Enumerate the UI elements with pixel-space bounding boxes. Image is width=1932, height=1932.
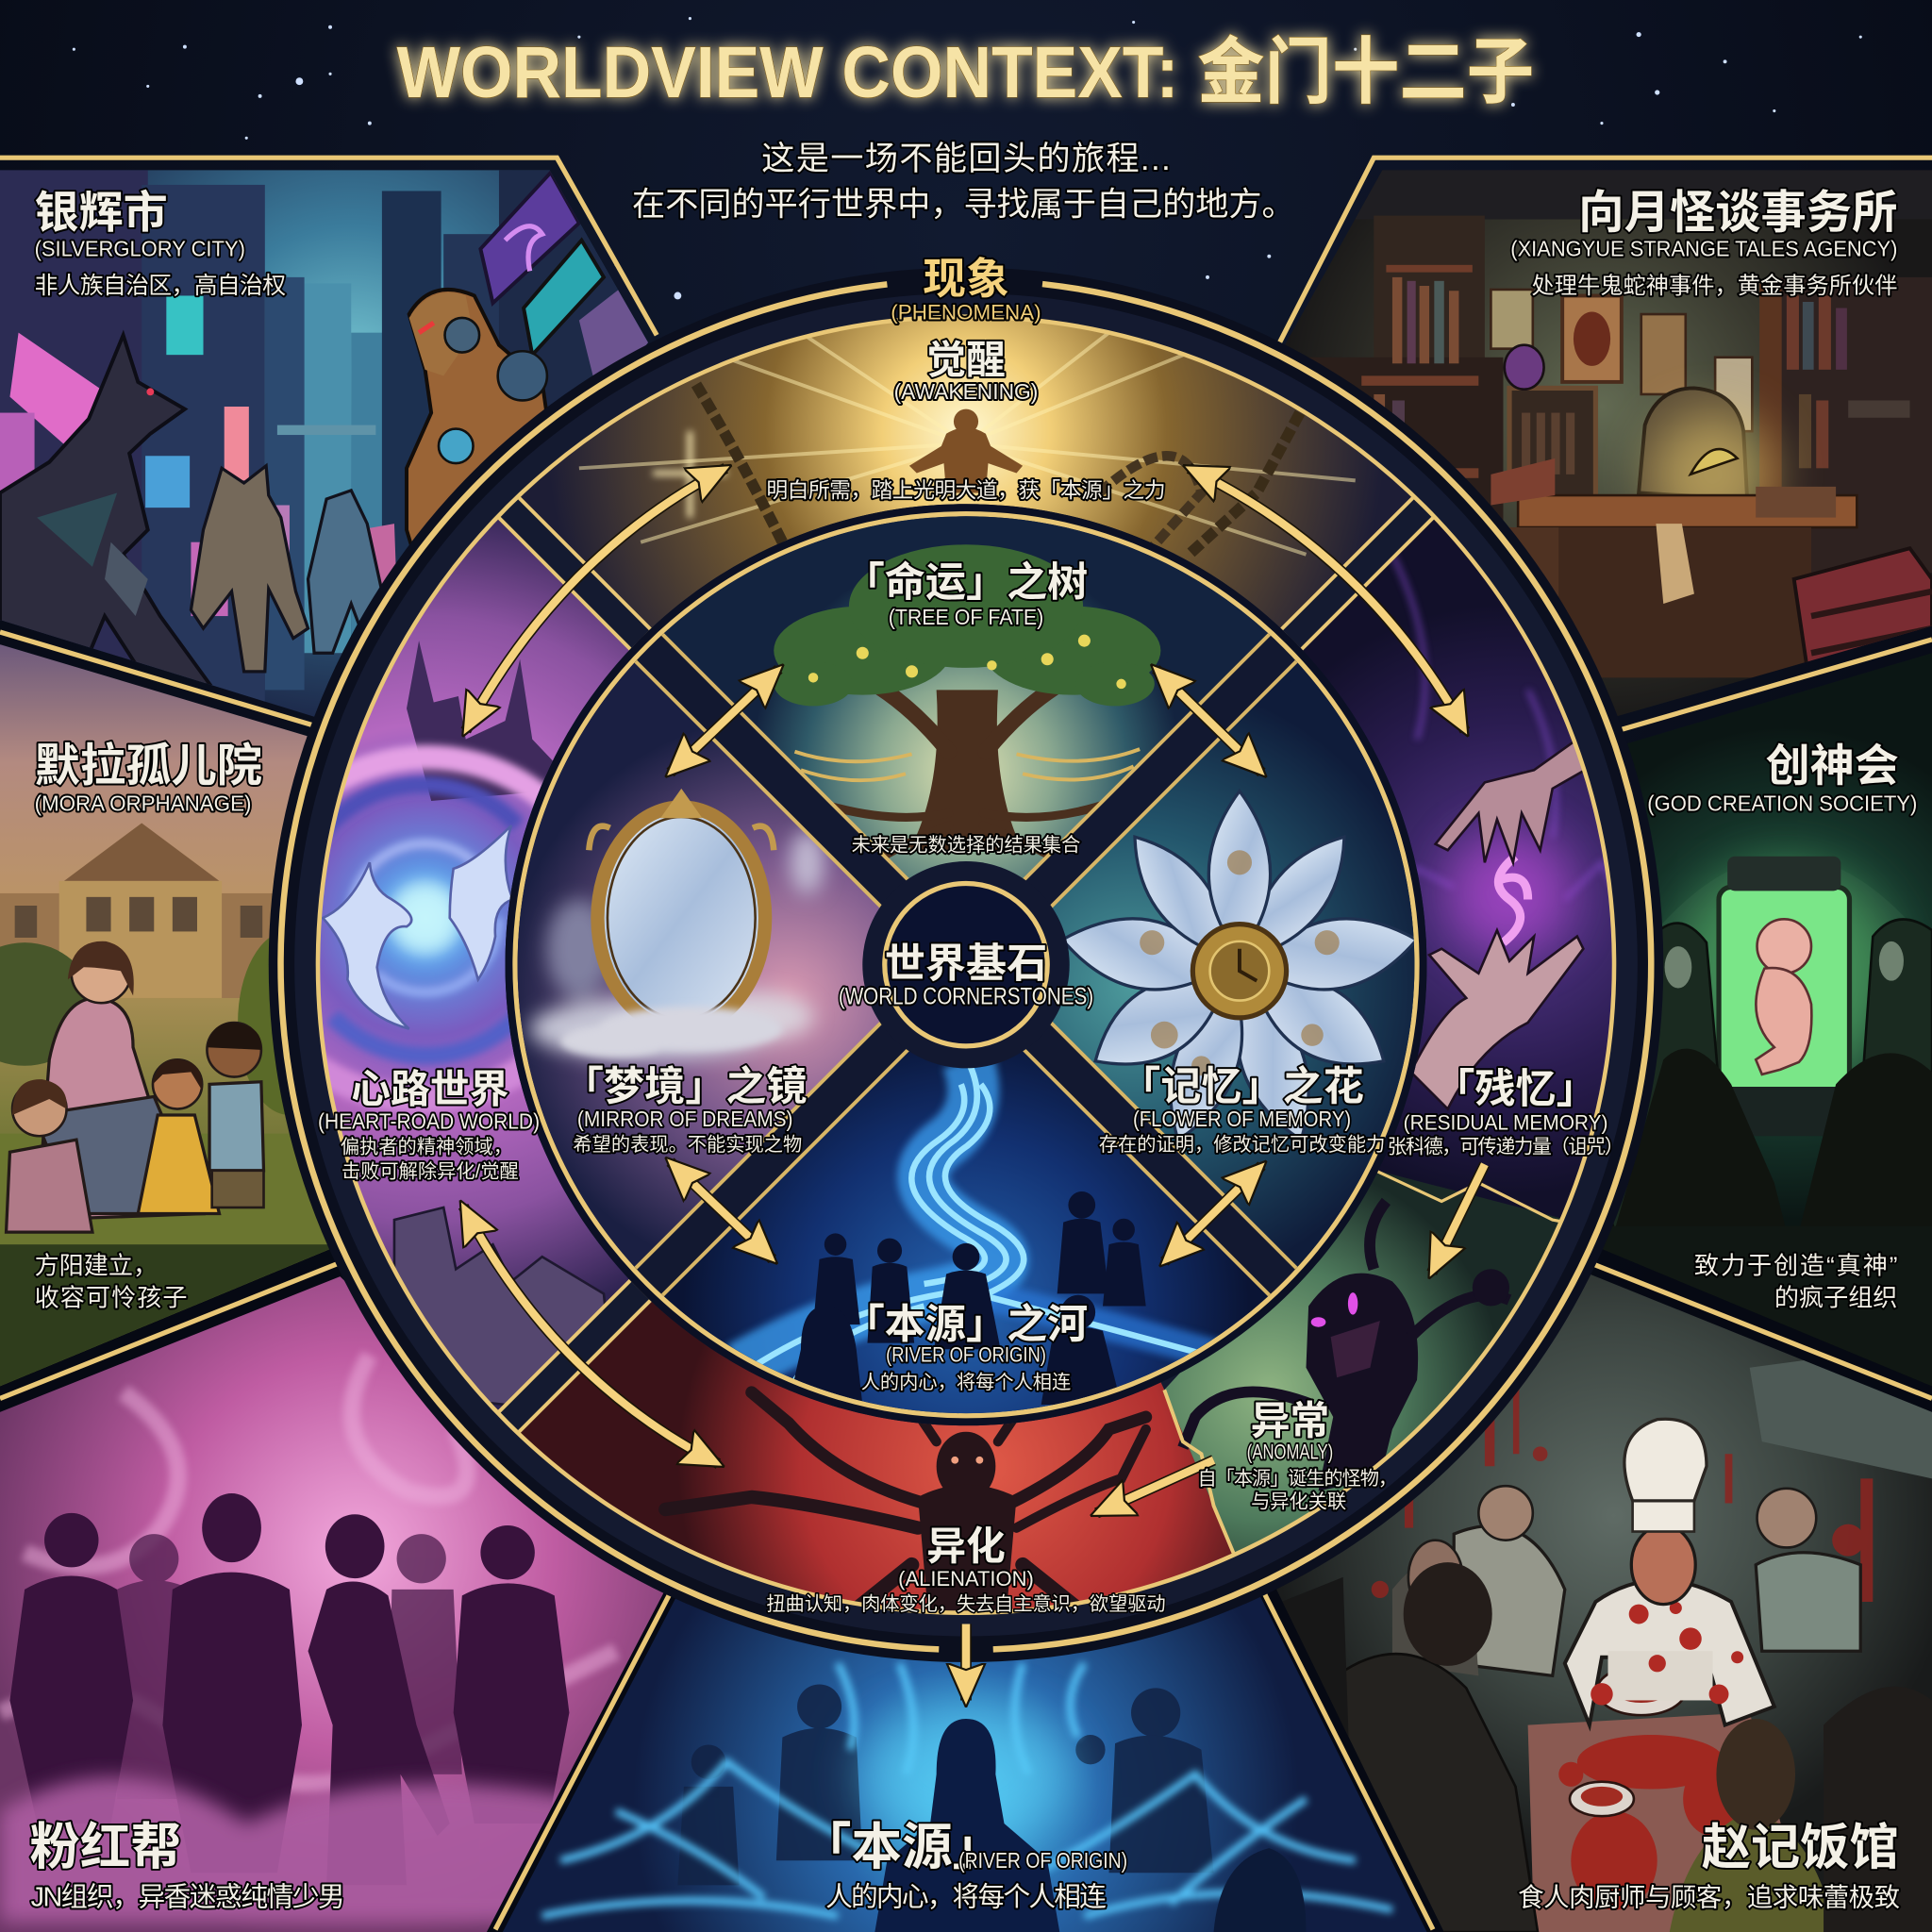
label: Heart-Road World: 心路世界	[351, 1067, 508, 1111]
label: Alienation: 异化	[926, 1524, 1006, 1569]
label: God Creation Society	[1647, 741, 1917, 1311]
inner disk: world cornerstones	[370, 369, 1562, 1561]
small robots	[191, 466, 308, 672]
table	[1528, 1713, 1811, 1932]
label: Mora Orphanage: 方阳建立，	[35, 1252, 158, 1280]
label: Awakening	[766, 338, 1166, 503]
label: Mirror of Dreams: 「梦境」之镜	[563, 1064, 807, 1109]
label: Heart-Road World: 击败可解除异化/觉醒	[341, 1161, 519, 1183]
small child	[7, 1140, 92, 1232]
label: Mirror of Dreams	[563, 1064, 807, 1156]
label: Xiangyue: (XIANGYUE STRANGE TALES AGENCY)	[1510, 237, 1897, 261]
label: Residual Memory	[1388, 1067, 1624, 1158]
label: Flower of Memory: (FLOWER OF MEMORY)	[1133, 1107, 1351, 1131]
label: Tree of Fate: 「命运」之树	[844, 560, 1088, 606]
centre hub: World Cornerstones: 世界基石	[885, 941, 1047, 987]
panel: Zhao's Restaurant	[1269, 1269, 1932, 1932]
label: Phenomena	[891, 255, 1041, 324]
label: Pink Gang: JN组织，异香迷惑纯情少男	[31, 1883, 345, 1913]
diners	[1337, 1654, 1538, 1932]
label: Zhao's Restaurant: 赵记饭馆	[1702, 1821, 1899, 1875]
panel: Origin	[492, 1583, 1441, 1932]
label: Anomaly: (ANOMALY)	[1247, 1440, 1333, 1463]
panel: Residual Memory	[966, 0, 1931, 1356]
label: God Creation Society: 的疯子组织	[1774, 1283, 1897, 1311]
label: Tree of Fate	[844, 560, 1088, 857]
separators between ring panels	[246, 245, 1686, 1684]
wolf cyborg	[0, 335, 209, 727]
label: Awakening: 觉醒	[926, 338, 1006, 382]
label: Xiangyue: 向月怪谈事务所	[1578, 188, 1897, 239]
label: River of Origin: 人的内心，将每个人相连	[861, 1372, 1071, 1393]
centre hub: World Cornerstones	[839, 861, 1093, 1068]
label: Anomaly: 与异化关联	[1251, 1491, 1346, 1513]
centre hub: World Cornerstones: (WORLD CORNERSTONES)	[839, 984, 1093, 1009]
panel: Xiangyue Strange Tales Agency	[1269, 160, 1932, 727]
arrows: cornerstones cycle	[671, 669, 1261, 1261]
label: Anomaly: 自「本源」诞生的怪物，	[1198, 1468, 1397, 1490]
label: River of Origin: (RIVER OF ORIGIN)	[886, 1342, 1046, 1366]
title: WORLDVIEW CONTEXT: 金门十二子	[397, 32, 1534, 113]
label: Awakening: (AWAKENING)	[894, 379, 1038, 404]
quadrant separators	[596, 595, 1336, 1335]
panel: Awakening	[1, 0, 1931, 965]
label: God Creation Society: 致力于创造“真神”	[1694, 1252, 1897, 1280]
label: Origin: 「本源」	[801, 1820, 1003, 1875]
panel: Pink Gang	[0, 1269, 677, 1932]
large robot	[405, 287, 547, 545]
label: Flower of Memory	[1099, 1064, 1385, 1156]
label: God Creation Society: 创神会	[1766, 741, 1899, 791]
label: Xiangyue: 处理牛鬼蛇神事件，黄金事务所伙伴	[1532, 274, 1897, 299]
panel: Heart-Road World	[1, 0, 966, 1929]
panel: Alienation	[1, 965, 1236, 1929]
label: Alienation	[766, 1524, 1166, 1615]
label: Silverglory City: 非人族自治区，高自治权	[35, 273, 286, 299]
label: Zhao's Restaurant: 食人肉厨师与顾客，追求味蕾极致	[1518, 1883, 1900, 1912]
boy	[209, 1082, 264, 1171]
quadrant: Tree of Fate	[370, 369, 1562, 965]
label: God Creation Society: (GOD CREATION SOCIETY)	[1647, 791, 1917, 815]
label: Anomaly	[1198, 1398, 1397, 1513]
label: Mora Orphanage: 收容可怜孩子	[35, 1283, 188, 1311]
label: Mirror of Dreams: 希望的表现。不能实现之物	[573, 1134, 802, 1156]
label: Origin: (RIVER OF ORIGIN)	[958, 1848, 1127, 1873]
panel: Mora Orphanage	[0, 644, 329, 1387]
label: Flower of Memory: 存在的证明，修改记忆可改变能力	[1099, 1134, 1385, 1156]
label: Tree of Fate: 未来是无数选择的结果集合	[852, 835, 1080, 857]
label: Pink Gang: 粉红帮	[29, 1820, 181, 1875]
panel: Silverglory City	[0, 160, 665, 752]
cooks	[1454, 1526, 1565, 1675]
label: Mora Orphanage: 默拉孤儿院	[35, 741, 262, 791]
label: Flower of Memory: 「记忆」之花	[1120, 1064, 1364, 1109]
label: Residual Memory: 张科德，可传递力量（诅咒）	[1388, 1137, 1624, 1158]
label: Pink Gang	[29, 1820, 345, 1913]
label: Mora Orphanage: (MORA ORPHANAGE)	[35, 791, 251, 815]
label: Mirror of Dreams: (MIRROR OF DREAMS)	[577, 1107, 792, 1131]
label: Silverglory City: 银辉市	[35, 188, 168, 238]
subtitle: 在不同的平行世界中，寻找属于自己的地方。	[632, 187, 1295, 224]
label: Silverglory City: (SILVERGLORY CITY)	[35, 237, 245, 261]
label: River of Origin: 「本源」之河	[844, 1302, 1088, 1347]
label: Origin: 人的内心，将每个人相连	[825, 1883, 1107, 1913]
label: Zhao's Restaurant	[1518, 1821, 1900, 1912]
label: Tree of Fate: (TREE OF FATE)	[889, 605, 1043, 629]
label: Xiangyue	[1510, 188, 1897, 299]
woman	[37, 998, 204, 1220]
label: Heart-Road World	[318, 1067, 540, 1183]
label: Awakening: 明白所需，踏上光明大道，获「本源」之力	[766, 478, 1166, 503]
label: Anomaly: 异常	[1251, 1398, 1329, 1442]
label: Phenomena: 现象	[923, 255, 1009, 303]
label: Residual Memory: 「残忆」	[1434, 1067, 1597, 1112]
chef	[1565, 1580, 1774, 1725]
central wheel: base disk and outer rings	[269, 267, 1663, 1662]
label: Origin	[801, 1820, 1127, 1913]
label: Residual Memory: (RESIDUAL MEMORY)	[1404, 1111, 1607, 1135]
quadrant: Flower of Memory	[966, 369, 1562, 1561]
arrows: phenomena cycle	[463, 468, 1485, 1700]
quadrant: River of Origin	[370, 965, 1562, 1561]
label: Alienation: 扭曲认知，肉体变化，失去自主意识，欲望驱动	[766, 1593, 1166, 1615]
label: Heart-Road World: 偏执者的精神领域，	[341, 1137, 512, 1158]
quadrant: Mirror of Dreams	[370, 369, 966, 1561]
label: Mora Orphanage	[35, 741, 262, 1311]
label: River of Origin	[844, 1302, 1088, 1393]
label: Alienation: (ALIENATION)	[898, 1567, 1034, 1591]
subtitle	[632, 141, 1295, 224]
subtitle: 这是一场不能回头的旅程...	[761, 141, 1171, 177]
label: Silverglory City	[35, 188, 286, 299]
label: Heart-Road World: (HEART-ROAD WORLD)	[318, 1108, 540, 1133]
panel: God Creation Society	[1603, 653, 1932, 1386]
girl in yellow	[138, 1115, 219, 1214]
panel: Anomaly	[1164, 1168, 1639, 1602]
label: Phenomena: (PHENOMENA)	[891, 300, 1041, 324]
